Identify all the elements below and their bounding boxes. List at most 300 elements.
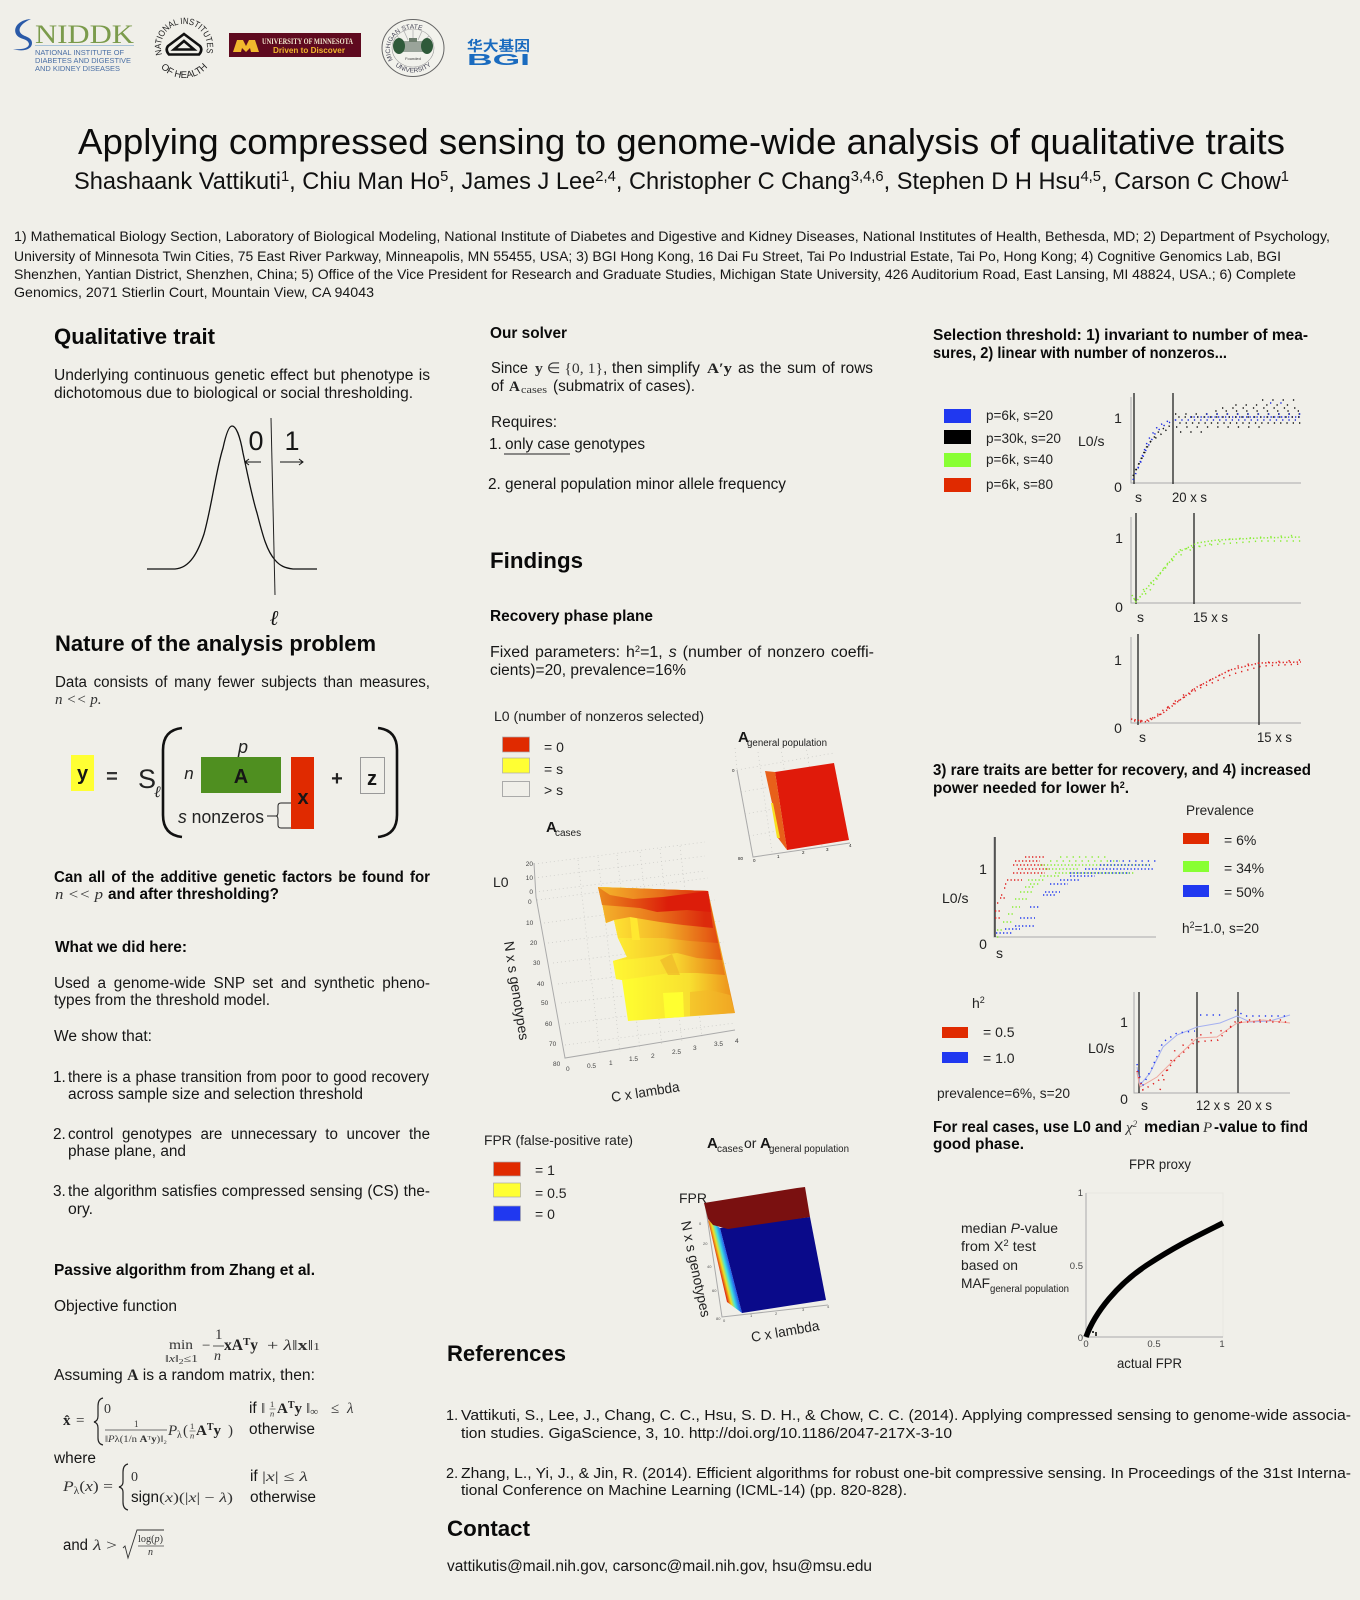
formula: lambda bound: λ > [92,1538,117,1554]
legend: prevalence: = 34% [1224,860,1264,876]
legend: FPR: = 0.5 [535,1185,567,1201]
formula: objective function [165,1327,320,1366]
panel: contact [447,1516,872,1575]
authors: Shashaank Vattikuti [74,168,284,195]
heading: contact: Contact [447,1516,531,1541]
surface plot: A cases: cases [555,828,581,839]
authors: 2,4 [595,168,616,185]
heading: nature of the analysis problem: Nature of the analysis problem [55,631,376,656]
formula: x hat piecewise: ‖ [261,1401,265,1417]
formula: objective function: + λ‖x‖1 [267,1338,320,1354]
formula: P lambda piecewise: 0 [131,1470,138,1485]
surface plot: A cases [493,819,739,1105]
legend: selection threshold series: p=6k, s=40 [986,451,1053,467]
text: where: where [53,1450,96,1467]
chart: FPR proxy: general population [990,1284,1069,1295]
formula: x hat piecewise: λ [346,1401,354,1417]
panel: nature of the analysis problem [54,631,430,903]
chart: L0/s by prevalence: 0 [979,936,987,952]
surface plot: FPR: A [707,1135,718,1152]
authors: , Christopher C Chang [616,168,851,195]
chart: FPR proxy: from X [961,1238,1002,1254]
formula: objective function: ‖x‖ [165,1354,178,1365]
formula: P lambda piecewise: x) = [85,1479,110,1495]
logo: Michigan State University seal: MICHIGAN STATE [386,24,423,62]
heading: real cases [933,1119,1308,1153]
logo: NIDDK: AND KIDNEY DISEASES [35,64,120,73]
surface plot: A general population: 2 [802,850,805,855]
chart: L0/s for s=40: 15 x s [1193,609,1228,625]
heading: our solver: Our solver [490,325,567,342]
list: findings: ory. [68,1201,93,1218]
surface plot: A cases: 0 [528,899,532,906]
surface plot: FPR: cases [717,1144,743,1155]
surface plot: A cases: N x s genotypes [501,940,532,1041]
surface plot: FPR: general population [769,1144,849,1155]
chart: L0/s by h2 [1088,992,1290,1113]
formula: P lambda piecewise: λ [74,1486,80,1497]
legend: h2 [937,995,1070,1101]
formula: x hat piecewise: λ [177,1430,182,1441]
text: solver description: Since [491,360,528,377]
heading: rare traits: . [1125,780,1129,797]
text: qualitative trait description: dichotomous due to biological or social thresholding. [54,385,413,402]
chart: FPR proxy: test [1009,1238,1036,1254]
chart: L0/s for s=40: 1 [1115,530,1123,546]
surface plot: A cases: 2 [651,1053,655,1060]
chart: L0/s for s=20 [1078,393,1301,505]
chart: L0/s for s=20: 0 [1114,479,1122,495]
formula: x hat piecewise: n [270,1408,274,1418]
legend: FPR: = 1 [535,1162,555,1178]
legend: selection threshold series: p=6k, s=20 [986,407,1053,423]
logo: Michigan State University seal: UNIVERSITY [396,62,430,72]
surface plot: FPR: 0 [699,1221,702,1226]
text: solver description: cases [521,385,547,396]
logo: NIDDK [13,19,134,73]
chart: L0/s for s=80: 1 [1114,652,1122,668]
formula: x hat piecewise: T [288,1400,295,1411]
chart: L0/s by prevalence: 1 [979,861,987,877]
logo: NIDDK: DIABETES AND DIGESTIVE [35,56,131,65]
heading: passive algorithm: Passive algorithm from Zhang et al. [54,1262,315,1279]
logo: Michigan State University seal [382,19,444,77]
legend: L0: = 0 [544,739,564,755]
diagram: threshold model equation: x [297,787,309,809]
list: findings: 3. [53,1183,66,1200]
diagram: threshold model equation: p [237,737,248,757]
heading: real cases: -value to find [1214,1119,1308,1136]
legend: h2: = 1.0 [983,1050,1015,1066]
title: Applying compressed sensing to genome-wide analysis of qualitative traits [78,121,1285,162]
text: solver description: as the sum of rows [738,360,873,377]
authors: 3,4,6 [851,168,884,185]
chart: FPR proxy: 1 [1078,1188,1083,1199]
text: solver description [491,360,873,396]
formula: lambda bound: n [148,1547,153,1558]
formula: objective function: 1 [215,1327,222,1343]
text: solver description: A [509,379,520,395]
list: findings: 1. [53,1069,66,1086]
chart: FPR proxy: 0 [1083,1339,1089,1350]
legend: L0: = s [544,761,563,777]
surface plot: A general population [732,729,852,863]
legend: FPR: = 0 [535,1206,555,1222]
heading: real cases: P [1202,1120,1212,1136]
heading: selection threshold: Selection threshold: 1) invariant to number of mea- [933,327,1308,344]
diagram: threshold model equation: s nonzeros [178,806,264,827]
list: findings: the algorithm satisfies compressed sensing (CS) the- [68,1183,430,1200]
text: data description: n << p. [55,692,102,708]
text: solver description: , then simplify [603,360,700,377]
surface plot: A cases: 20 [530,940,538,947]
authors: , Carson C Chow [1101,168,1281,195]
legend: h2: h [972,995,980,1011]
text: requirements: 2. [488,476,501,493]
surface plot: A general population: 80 [738,856,744,861]
panel: what we did here [53,939,430,1218]
formula: x hat piecewise: otherwise [249,1421,315,1438]
chart: L0/s for s=80 [1114,634,1301,745]
legend: L0: > s [544,782,563,798]
logo: BGI: 华大基因 [467,38,530,54]
chart: FPR proxy: 0 [1078,1333,1083,1344]
chart: threshold bell curve [147,418,317,630]
text: fixed parameters: =1, [640,644,669,661]
list: references: Zhang, L., Yi, J., & Jin, R. (2014). Efficient algorithms for robust one-bit compressive sensing. In Proceedings of the 31st Interna- [461,1466,1351,1482]
legend: FPR [484,1132,633,1222]
formula: x hat piecewise: A [277,1401,288,1417]
legend: selection threshold series [944,407,1061,492]
text: objective function label: Objective function [54,1298,177,1315]
diagram: threshold model equation: y [77,763,89,785]
legend: h2: = 0.5 [983,1024,1015,1040]
formula: objective function: min [169,1338,193,1353]
surface plot: A cases: 30 [533,960,541,967]
heading: findings: Findings [490,548,583,573]
chart: L0/s for s=20: 1 [1114,410,1122,426]
formula: P lambda piecewise: sign [131,1489,159,1506]
text: data description: Data consists of many fewer subjects than measures, [55,674,430,691]
diagram: threshold model equation: S [138,764,156,794]
surface plot: A cases: C x lambda [610,1078,681,1105]
heading: what we did here: What we did here: [55,939,187,956]
chart: L0/s for s=20: 20 x s [1172,489,1207,505]
legend: selection threshold series: p=6k, s=80 [986,476,1053,492]
text: contact emails: vattikutis@mail.nih.gov, carsonc@mail.nih.gov, hsu@msu.edu [447,1558,872,1575]
chart: FPR proxy: 0.5 [1147,1339,1161,1350]
chart: FPR proxy: 1 [1219,1339,1225,1350]
text: data description [55,674,430,708]
surface plot: FPR: 4 [827,1304,830,1309]
surface plot: A cases: 40 [537,981,545,988]
logo: University of Minnesota [229,33,361,57]
surface plot: FPR: or [744,1135,757,1151]
formula: P lambda piecewise: P [62,1479,74,1495]
chart: FPR proxy: FPR proxy [1129,1156,1191,1172]
surface plot: FPR: N x s genotypes [678,1219,714,1318]
legend: FPR: FPR (false-positive rate) [484,1132,633,1148]
surface plot: A cases: 10 [526,875,533,882]
heading: selection threshold: sures, 2) linear with number of nonzeros... [933,345,1227,362]
surface plot: A cases: L0 [493,874,509,890]
list: findings: 2. [53,1126,66,1143]
heading: real cases: good phase. [933,1136,1024,1153]
text: qualitative trait description: Underlying continuous genetic effect but phenotype is [54,367,430,384]
legend: h2: prevalence=6%, s=20 [937,1085,1070,1101]
surface plot: A cases: 3.5 [714,1041,723,1048]
logo: Michigan State University seal: Founded [405,56,421,61]
authors: 1 [1281,168,1289,185]
surface plot: FPR: 60 [712,1288,717,1293]
surface plot: FPR: 40 [707,1264,712,1269]
surface plot: FPR: A [760,1135,771,1152]
legend: selection threshold series: p=30k, s=20 [986,430,1061,446]
chart: L0/s by h2: 20 x s [1237,1097,1272,1113]
text: requirements: general population minor allele frequency [505,476,786,493]
text: fixed parameters: cients)=20, prevalence=16% [490,662,686,679]
formula: x hat piecewise: ≤ [331,1401,339,1417]
panel: rare traits [933,762,1311,1113]
formula: x hat piecewise [63,1398,354,1445]
text: question: and after thresholding? [108,886,279,903]
chart: L0/s for s=80: s [1139,729,1146,745]
panel: findings [484,548,874,1345]
text: solver description: (submatrix of cases). [553,378,695,395]
formula: P lambda piecewise: (x)(|x| − λ) [159,1491,233,1506]
logo: NIH: NATIONAL INSTITUTES [154,18,214,56]
formula: x hat piecewise: 1 [134,1419,138,1429]
surface plot: A cases: 0.5 [587,1063,596,1070]
chart: L0/s for s=20: L0/s [1078,433,1104,449]
formula: x hat piecewise: 0 [104,1402,111,1417]
chart: L0/s by prevalence [942,837,1157,961]
formula: x hat piecewise: = [76,1413,84,1429]
formula: P lambda piecewise: |x| ≤ λ [262,1470,308,1485]
logo: NIDDK: NATIONAL INSTITUTE OF [35,48,124,57]
chart: FPR proxy: median P-value [961,1220,1058,1236]
surface plot: A general population: 3 [826,847,829,852]
chart: L0/s for s=20: s [1135,489,1142,505]
text: fixed parameters: 2 [635,644,640,654]
subheading: recovery phase plane: Recovery phase plane [490,608,653,625]
formula: x hat piecewise: ‖ [306,1401,310,1417]
legend: prevalence: = 50% [1224,884,1264,900]
logo: NIH: OF HEALTH [162,63,208,78]
legend: prevalence: Prevalence [1186,802,1254,818]
diagram: threshold model equation: = [106,766,118,788]
chart: L0/s by prevalence: L0/s [942,890,968,906]
text: assuming: Assuming A is a random matrix, then: [54,1367,315,1384]
chart: L0/s for s=80: 15 x s [1257,729,1292,745]
diagram: threshold model equation: + [331,768,343,790]
heading: real cases: median [1144,1119,1200,1136]
surface plot: A general population: 0 [732,768,735,773]
list: findings: phase plane, and [68,1143,186,1160]
chart: FPR proxy [961,1156,1225,1371]
formula: objective function: ≤1 [184,1354,198,1365]
heading: real cases: χ [1126,1120,1133,1136]
formula: x hat piecewise: P [167,1423,177,1439]
text: question: Can all of the additive genetic factors be found for [54,869,430,886]
list: references: 1. [446,1408,458,1424]
text: requirements: Requires: [491,414,557,431]
text: methods: We show that: [54,1028,152,1045]
formula: objective function: − [202,1338,210,1354]
authors: , Chiu Man Ho [289,168,440,195]
formula: x hat piecewise: ∞ [310,1406,318,1418]
text: methods: types from the threshold model. [54,992,270,1009]
list: references: tion studies. GigaScience, 3, 10. http://doi.org/10.1186/2047-217X-3-10 [461,1426,952,1442]
authors: , James J Lee [448,168,595,195]
heading: real cases: 2 [1133,1119,1138,1129]
heading: rare traits: power needed for lower h [933,780,1119,797]
chart: FPR proxy: MAF [961,1275,990,1291]
heading: real cases: For real cases, use L0 and [933,1119,1122,1136]
logo: BGI: BGI [467,52,530,69]
surface plot: FPR: 2 [775,1311,778,1316]
list: findings: there is a phase transition from poor to good recovery [68,1069,429,1086]
formula: objective function: T [243,1336,251,1348]
legend: h2: 2 [980,995,985,1005]
surface plot: A cases: 1 [609,1060,613,1067]
panel: references [446,1341,1351,1499]
surface plot: A cases: 2.5 [672,1049,681,1056]
surface plot: A cases: 50 [541,1000,549,1007]
formula: P lambda piecewise: if [250,1468,258,1485]
authors: 1 [281,168,289,185]
authors: 4,5 [1080,168,1101,185]
authors: , Stephen D H Hsu [884,168,1080,195]
surface plot: A cases: 60 [545,1021,553,1028]
text: requirements: only case genotypes [505,436,645,453]
chart: L0/s by h2: L0/s [1088,1040,1114,1056]
heading: rare traits: 3) rare traits are better for recovery, and 4) increased [933,762,1311,779]
legend: prevalence: =1.0, s=20 [1194,920,1259,936]
text: requirements [488,414,786,493]
surface plot: A cases: 1.5 [629,1056,638,1063]
surface plot: A cases: 0 [566,1066,570,1073]
list: references: 2. [446,1466,458,1482]
formula: lambda bound: log(p) [138,1534,163,1545]
formula: x hat piecewise: y [295,1401,303,1417]
surface plot: A general population: 0 [753,858,756,863]
formula: x hat piecewise: T [207,1422,214,1433]
formula: x hat piecewise: if [249,1400,257,1417]
panel: selection threshold [933,327,1308,745]
surface plot: A cases: 80 [553,1061,561,1068]
surface plot: FPR: 1 [750,1313,753,1318]
surface plot: FPR: C x lambda [750,1317,821,1345]
chart: FPR proxy: 0.5 [1070,1261,1083,1272]
affiliations [14,228,1330,300]
list: references [446,1408,1351,1499]
formula: x hat piecewise: ( [183,1423,188,1439]
surface plot: A general population: 1 [777,854,780,859]
affiliations: Shenzhen, Yantian District, Shenzhen, China; 5) Office of the Vice President for Research and Graduate Studies, Michigan State University, 426 Auditorium Road, East Lansing, MI 48824, USA.; 6) Complete [14,266,1296,282]
heading: references: References [447,1341,566,1366]
surface plot: FPR: 80 [716,1316,721,1321]
text: requirements: 1. [489,436,502,453]
heading: rare traits [933,762,1311,797]
list: references: tional Conference on Machine Learning (ICML-14) (pp. 820-828). [461,1483,907,1499]
formula: x hat piecewise: ) [228,1423,233,1439]
chart: FPR proxy: actual FPR [1117,1355,1182,1371]
heading: qualitative trait: Qualitative trait [54,324,216,349]
surface plot: A cases: 0 [529,889,533,896]
text: question [54,869,430,903]
chart: threshold bell curve: ℓ [270,606,279,630]
formula: P lambda piecewise [62,1464,316,1510]
formula: objective function: 2 [179,1358,184,1366]
text: methods: Used a genome-wide SNP set and synthetic pheno- [54,975,430,992]
legend: L0 [494,708,704,798]
panel: real cases [933,1119,1308,1371]
chart: L0/s for s=40 [1115,513,1301,625]
affiliations: 1) Mathematical Biology Section, Laboratory of Biological Modeling, National Institute of Diabetes and Digestive and Kidney Diseases, National Institutes of Health, Bethesda, MD; 2) Department of Psychology, [14,228,1330,244]
text: solver description: y ∈ {0, 1} [535,361,603,377]
surface plot: A general population: general population [747,738,827,749]
formula: x hat piecewise: n [190,1430,194,1440]
diagram: threshold model equation: A [234,766,248,788]
formula: objective function: n [214,1349,221,1364]
formula: x hat piecewise: 1 [270,1399,274,1409]
legend: prevalence [1182,802,1264,936]
chart: L0/s for s=40: s [1137,609,1144,625]
text: fixed parameters [490,644,874,679]
surface plot: A cases: 20 [526,861,533,868]
surface plot: A general population: A [738,729,749,746]
chart: threshold bell curve: 0 [248,426,264,456]
authors: 5 [440,168,448,185]
text: methods [54,975,430,1045]
surface plot: A cases: A [546,819,557,836]
list: findings: across sample size and selection threshold [68,1086,363,1103]
logo: NIH [154,18,214,78]
list: findings: control genotypes are unnecessary to uncover the [68,1126,430,1143]
panel: qualitative trait [54,324,430,630]
text: solver description: of [491,378,505,395]
surface plot: FPR: 3 [802,1307,805,1312]
formula: P lambda piecewise: otherwise [250,1489,316,1506]
heading: selection threshold [933,327,1308,362]
formula: x hat piecewise: 1 [190,1421,194,1431]
chart: FPR proxy: based on [961,1257,1018,1273]
text: solver description: A′y [707,361,733,377]
text: question: n << p [55,887,104,903]
chart: L0/s by h2: 12 x s [1196,1097,1230,1113]
legend: prevalence: 2 [1190,920,1194,930]
legend: L0: L0 (number of nonzeros selected) [494,708,704,724]
list: findings [53,1069,430,1218]
legend: prevalence: = 6% [1224,832,1256,848]
panel: our solver [488,325,873,493]
text: fixed parameters: s (number of nonzero coeffi- [669,644,867,661]
formula: x hat piecewise: ‖Pλ(1/n Aᵀy)‖₂ [105,1434,167,1444]
chart: L0/s by prevalence: s [996,945,1003,961]
formula: lambda bound: and [63,1537,88,1554]
surface plot: A cases: 4 [735,1038,739,1045]
surface plot: A cases: 3 [693,1045,697,1052]
logo: NIDDK: NIDDK [35,20,134,49]
panel: passive algorithm [53,1262,354,1558]
logo: University of Minnesota: Driven to Discover [273,46,345,55]
chart: L0/s for s=40: 0 [1115,599,1123,615]
logo: University of Minnesota: UNIVERSITY OF MINNESOTA [262,37,353,46]
legend: prevalence: h [1182,920,1190,936]
chart: FPR proxy: 2 [1004,1238,1009,1248]
diagram: threshold model equation: z [367,768,377,790]
